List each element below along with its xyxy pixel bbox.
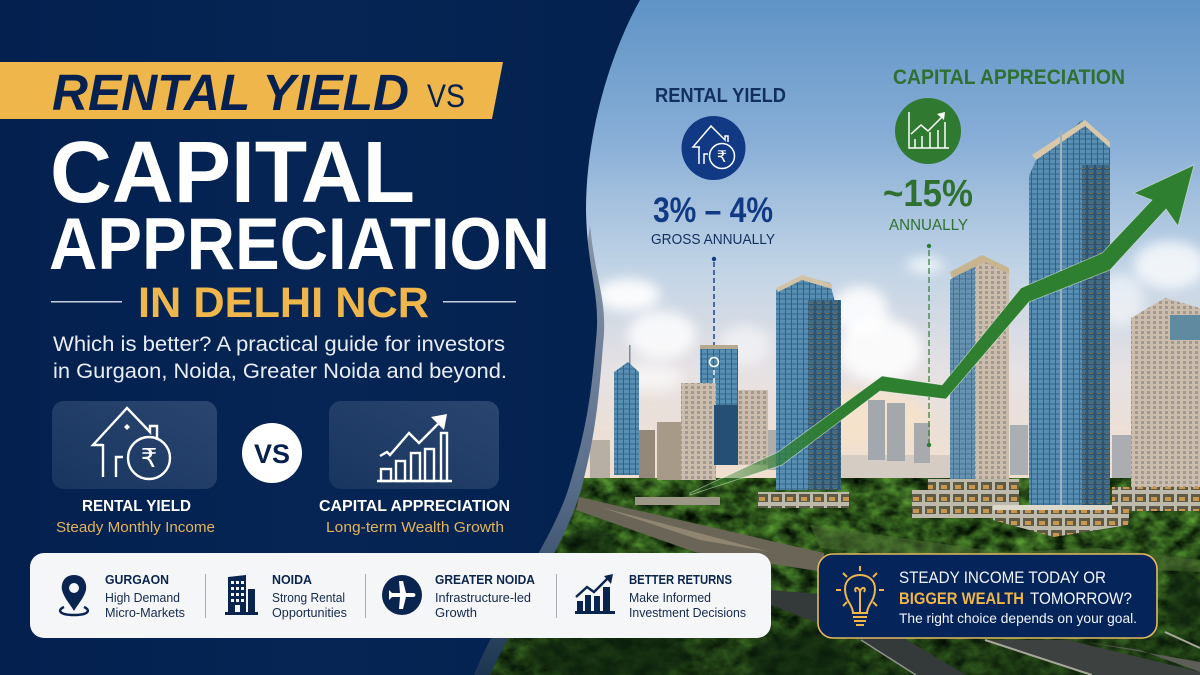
panel: capital appreciation card [319, 401, 510, 536]
value: ~15% [883, 173, 973, 215]
podium buildings [635, 479, 1200, 537]
text: Growth [435, 606, 477, 620]
icon: office building [225, 575, 258, 615]
title: rental yield: RENTAL YIELD [52, 64, 409, 121]
icon: map pin [60, 575, 88, 615]
icon: house with rupee in circle [682, 116, 746, 180]
caption: GROSS ANNUALLY [651, 231, 775, 248]
text: Strong Rental [272, 591, 345, 605]
title: appreciation: APPRECIATION [49, 204, 550, 285]
text: GREATER NOIDA [435, 572, 536, 587]
dotted leader [710, 257, 718, 386]
text [435, 572, 536, 620]
heading: CAPITAL APPRECIATION [893, 66, 1125, 89]
item: gurgaon [60, 572, 185, 620]
distant skyline [590, 400, 1132, 490]
panel: locations strip [30, 553, 771, 638]
icon: house with rupee coin: ₹ [141, 444, 157, 474]
capital appreciation stat block [883, 66, 1125, 447]
label: steady monthly income: Steady Monthly Income [56, 520, 215, 536]
icon: airplane in circle [382, 575, 422, 615]
towers [614, 120, 1200, 507]
item: noida [225, 572, 347, 620]
label: rental yield: RENTAL YIELD [82, 498, 191, 515]
icon: light bulb [836, 566, 884, 625]
text: Make Informed [629, 591, 711, 605]
text [629, 572, 746, 620]
text [105, 572, 185, 620]
callout text: The right choice depends on your goal. [899, 610, 1137, 626]
icon: house with rupee coin [93, 408, 170, 479]
vs badge [242, 423, 302, 483]
heading: RENTAL YIELD [655, 85, 786, 107]
foreground shade [440, 540, 1200, 675]
panel: rental yield card [52, 401, 217, 536]
text: Investment Decisions [629, 606, 746, 620]
callout text: BIGGER WEALTH [899, 589, 1024, 608]
rental yield stat block [651, 85, 786, 386]
photo background: skyline scene [440, 0, 1200, 675]
text: Infrastructure-led [435, 591, 531, 605]
text: BETTER RETURNS [629, 572, 732, 587]
title banner [0, 62, 503, 121]
item: greater noida [382, 572, 536, 620]
mid green field [810, 525, 1200, 572]
vs badge: VS [254, 439, 290, 469]
intro text [53, 333, 507, 383]
value: 3% – 4% [653, 191, 773, 230]
subtitle: in delhi ncr: IN DELHI NCR [138, 279, 429, 327]
text: GURGAON [105, 572, 169, 587]
text: NOIDA [272, 572, 313, 587]
label: long-term wealth growth: Long-term Wealth Growth [326, 520, 504, 536]
clouds [596, 241, 1200, 450]
left navy curved panel [0, 0, 640, 675]
dark tree clusters [530, 527, 1200, 675]
icon: chart in green circle [895, 98, 961, 164]
callout text: STEADY INCOME TODAY OR [899, 568, 1106, 587]
text [272, 572, 347, 620]
ground foliage [440, 478, 1200, 675]
text: Micro-Markets [105, 606, 185, 620]
text: Opportunities [272, 606, 347, 620]
item: better returns [575, 572, 746, 620]
label: capital appreciation: CAPITAL APPRECIATION [319, 498, 510, 515]
title: capital: CAPITAL [50, 124, 415, 221]
dotted leader [927, 244, 931, 447]
intro text: in Gurgaon, Noida, Greater Noida and beyond. [53, 360, 507, 383]
callout: steady income or bigger wealth [818, 554, 1157, 638]
text: High Demand [105, 591, 180, 605]
growth arrow [690, 165, 1194, 495]
icon: bar chart with arrow [575, 574, 615, 614]
highway [576, 497, 1200, 675]
caption: ANNUALLY [889, 217, 968, 234]
icon: house with rupee in circle: ₹ [717, 147, 727, 166]
title: vs: VS [427, 78, 465, 114]
icon: rising bar chart [377, 414, 452, 481]
callout text: TOMORROW? [1030, 589, 1132, 608]
intro text: Which is better? A practical guide for investors [53, 333, 505, 356]
callout text [899, 568, 1137, 626]
